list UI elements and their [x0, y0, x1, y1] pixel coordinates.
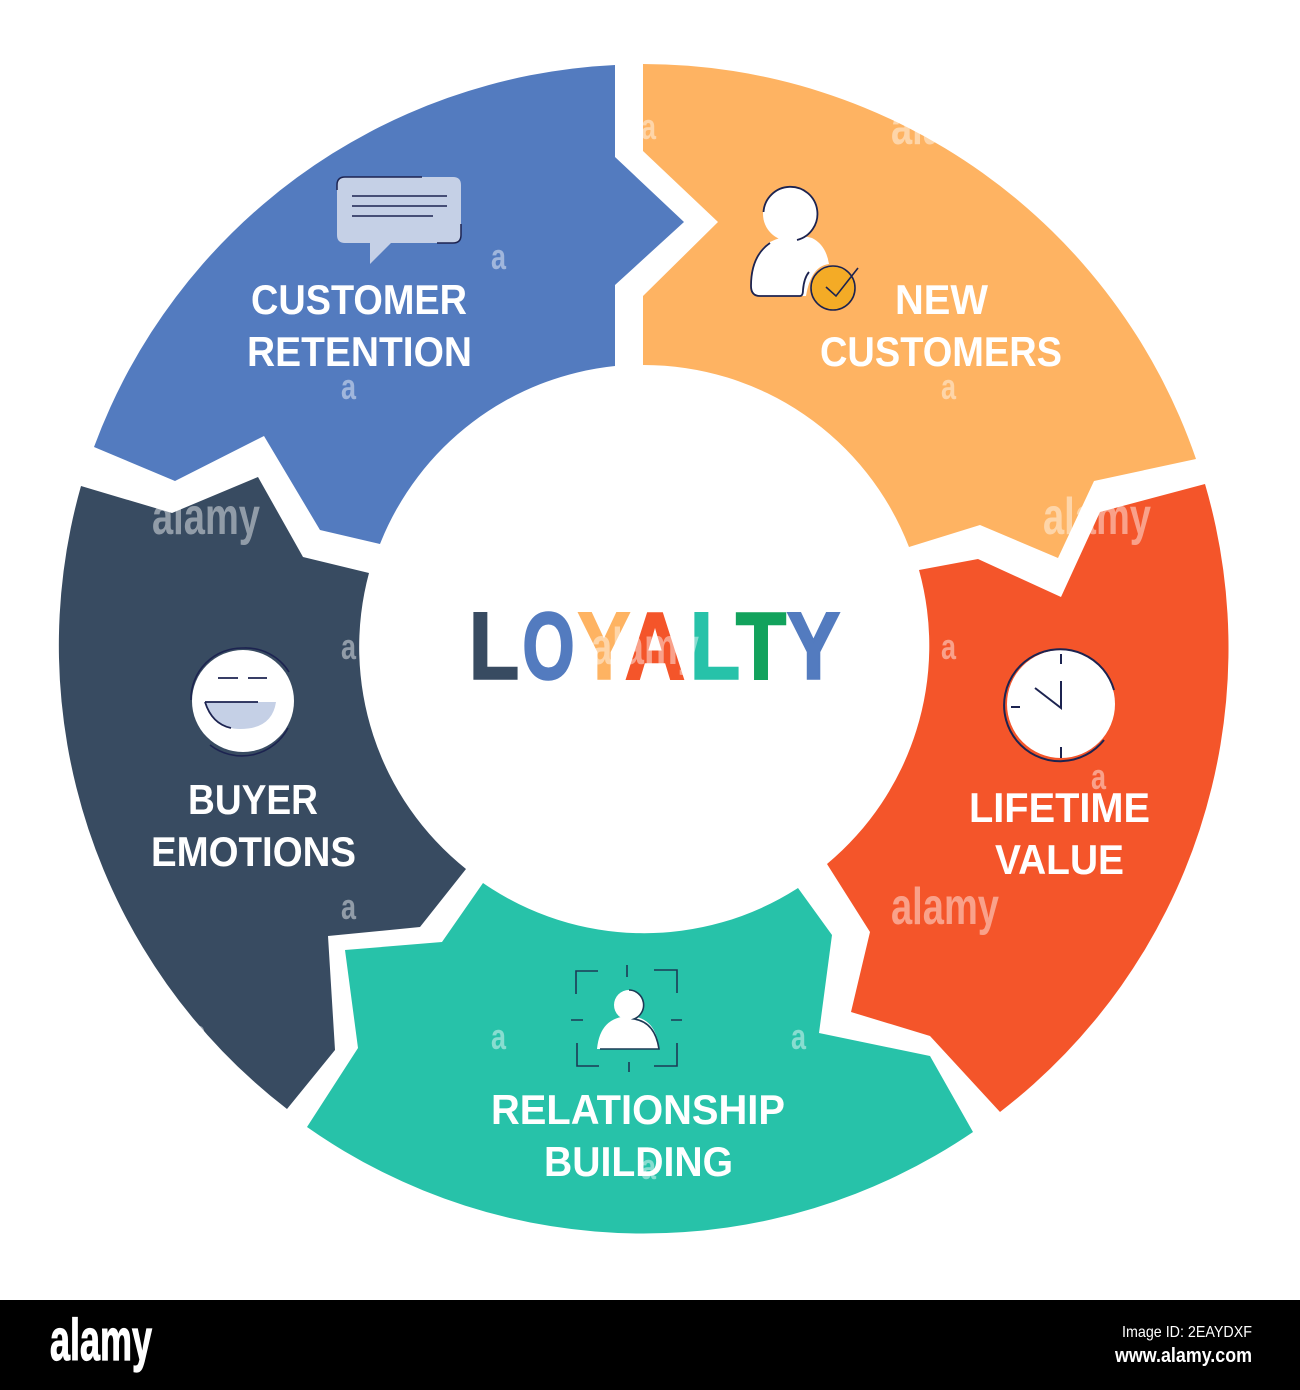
icon: speech bubble — [337, 177, 461, 264]
watermarks: a — [341, 366, 357, 407]
watermarks: alamy — [1043, 488, 1151, 546]
title: LOYALTY: O — [522, 594, 574, 700]
label: customer retention: CUSTOMER — [251, 276, 467, 323]
footer logo: alamy — [50, 1308, 152, 1373]
watermarks: a — [191, 1012, 207, 1053]
label: relationship building: BUILDING — [544, 1138, 733, 1185]
label: new customers: NEW — [895, 276, 988, 323]
title: LOYALTY: L — [469, 594, 519, 700]
icon: clock — [1004, 649, 1115, 761]
label: lifetime value: LIFETIME — [969, 784, 1150, 831]
watermarks — [152, 98, 1151, 1187]
label: buyer emotions: BUYER — [188, 776, 318, 823]
watermarks: a — [641, 1146, 657, 1187]
watermarks: a — [491, 1016, 507, 1057]
image id: Image ID: 2EAYDXF — [1122, 1324, 1252, 1341]
panel: relationship building segment — [307, 883, 973, 1234]
watermarks: alamy — [891, 878, 999, 936]
icon: person in focus frame — [571, 965, 682, 1072]
panel: new customers segment — [643, 64, 1196, 558]
title: LOYALTY: T — [736, 594, 786, 700]
watermarks: alamy — [891, 98, 999, 156]
icon: smiling face — [191, 648, 294, 756]
watermarks: alamy — [152, 488, 260, 546]
label: customer retention: RETENTION — [247, 328, 472, 375]
website: www.alamy.com — [1114, 1345, 1252, 1367]
label: lifetime value: VALUE — [995, 836, 1124, 883]
watermarks: a — [341, 886, 357, 927]
label: new customers: CUSTOMERS — [820, 328, 1062, 375]
watermarks: a — [491, 236, 507, 277]
label: relationship building: RELATIONSHIP — [491, 1086, 785, 1133]
panel: lifetime value segment — [827, 484, 1229, 1112]
watermarks: alamy — [591, 618, 699, 676]
panel: buyer emotions segment — [59, 477, 466, 1109]
footer bar — [0, 1300, 1300, 1390]
watermarks: a — [941, 626, 957, 667]
title: LOYALTY — [469, 594, 840, 700]
watermarks: a — [791, 1016, 807, 1057]
title: LOYALTY: L — [690, 594, 740, 700]
watermarks: a — [941, 366, 957, 407]
panel: customer retention segment — [94, 65, 684, 544]
title: LOYALTY: Y — [787, 594, 840, 700]
watermarks: a — [1091, 756, 1107, 797]
title: LOYALTY: Y — [578, 594, 630, 700]
label: buyer emotions: EMOTIONS — [151, 828, 356, 875]
watermarks: a — [641, 106, 657, 147]
title: LOYALTY: A — [625, 594, 685, 700]
icon: person with check badge — [751, 187, 858, 310]
watermarks: a — [341, 626, 357, 667]
